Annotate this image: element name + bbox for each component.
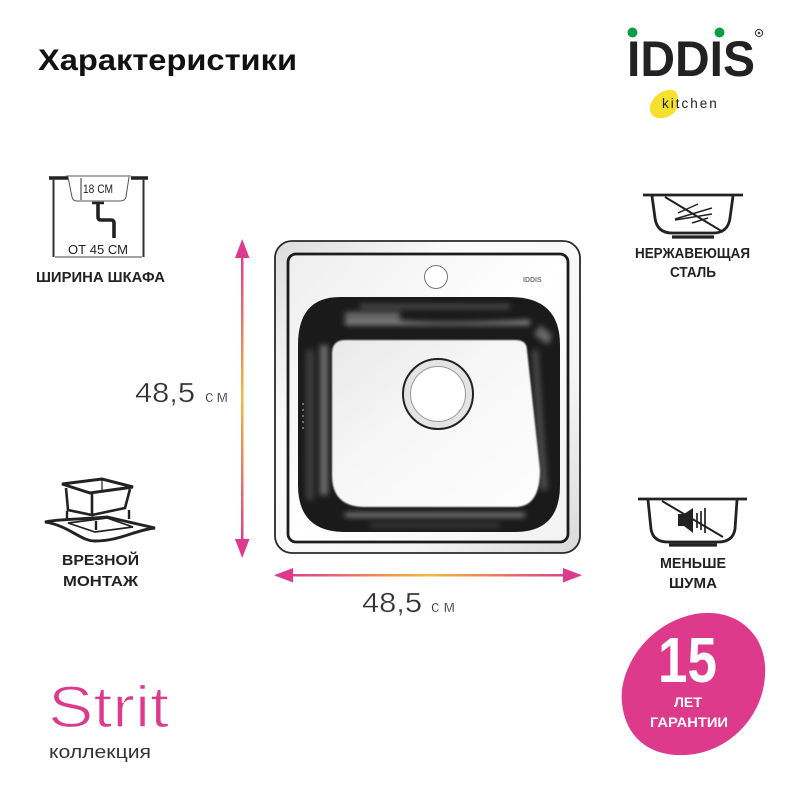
- sink: wall rivets: [302, 403, 304, 429]
- text: height: [135, 377, 228, 408]
- text: cabinet width label: ШИРИНА ШКАФА: [36, 270, 165, 286]
- logo: wordmark: IDDIS: [627, 31, 755, 87]
- collection caption: коллекция: [49, 742, 151, 762]
- icon: stainless steel: [643, 195, 743, 237]
- sink: inner deck: [288, 254, 568, 542]
- badge: text: [650, 694, 728, 730]
- collection name: Strit: [48, 675, 169, 740]
- icon: inset mounting: [45, 479, 155, 541]
- text: width: 48,5: [362, 587, 422, 618]
- warranty badge: [622, 613, 765, 755]
- logo: IDDIS kitchen: [627, 28, 763, 118]
- text: height: 48,5: [135, 377, 195, 408]
- sink photo: [275, 241, 580, 553]
- text: stainless steel label: [635, 246, 750, 281]
- icon: cabinet width: [49, 176, 148, 257]
- text: less noise label: МЕНЬШЕ: [660, 555, 726, 572]
- title: Характеристики: [38, 44, 297, 77]
- badge: blob: [622, 613, 765, 755]
- logo: green dots: [628, 28, 724, 38]
- badge: text: ГАРАНТИИ: [650, 714, 728, 730]
- logo: registered mark: [755, 29, 763, 37]
- logo: yellow blob: [650, 90, 678, 118]
- text: width: см: [431, 597, 455, 616]
- sink: small logo: IDDIS: [523, 277, 542, 284]
- text: less noise label: ШУМА: [669, 575, 717, 592]
- text: inset mounting label: ВРЕЗНОЙ: [62, 551, 139, 569]
- text: width: [362, 587, 455, 618]
- text: less noise label: [660, 555, 726, 592]
- arrow: height: [235, 239, 250, 558]
- text: 18 cm: 18 СМ: [83, 184, 113, 196]
- text: inset mounting label: [62, 551, 139, 590]
- sink: drain: [403, 359, 473, 429]
- badge: 15: 15: [658, 624, 717, 696]
- arrow: width: [274, 568, 582, 582]
- sink: bowl: [298, 297, 560, 532]
- text: from 45 cm: ОТ 45 СМ: [68, 242, 128, 257]
- text: inset mounting label: МОНТАЖ: [63, 573, 138, 590]
- text: height: см: [205, 387, 228, 406]
- badge: text: ЛЕТ: [674, 694, 702, 710]
- text: stainless steel label: СТАЛЬ: [670, 265, 716, 281]
- sink: tap hole: [424, 266, 448, 288]
- icon: less noise: [638, 499, 747, 545]
- sink: bowl floor: [332, 340, 540, 507]
- logo: kitchen: kitchen: [662, 96, 719, 111]
- text: stainless steel label: НЕРЖАВЕЮЩАЯ: [635, 246, 750, 262]
- sink: outer rim: [275, 241, 580, 553]
